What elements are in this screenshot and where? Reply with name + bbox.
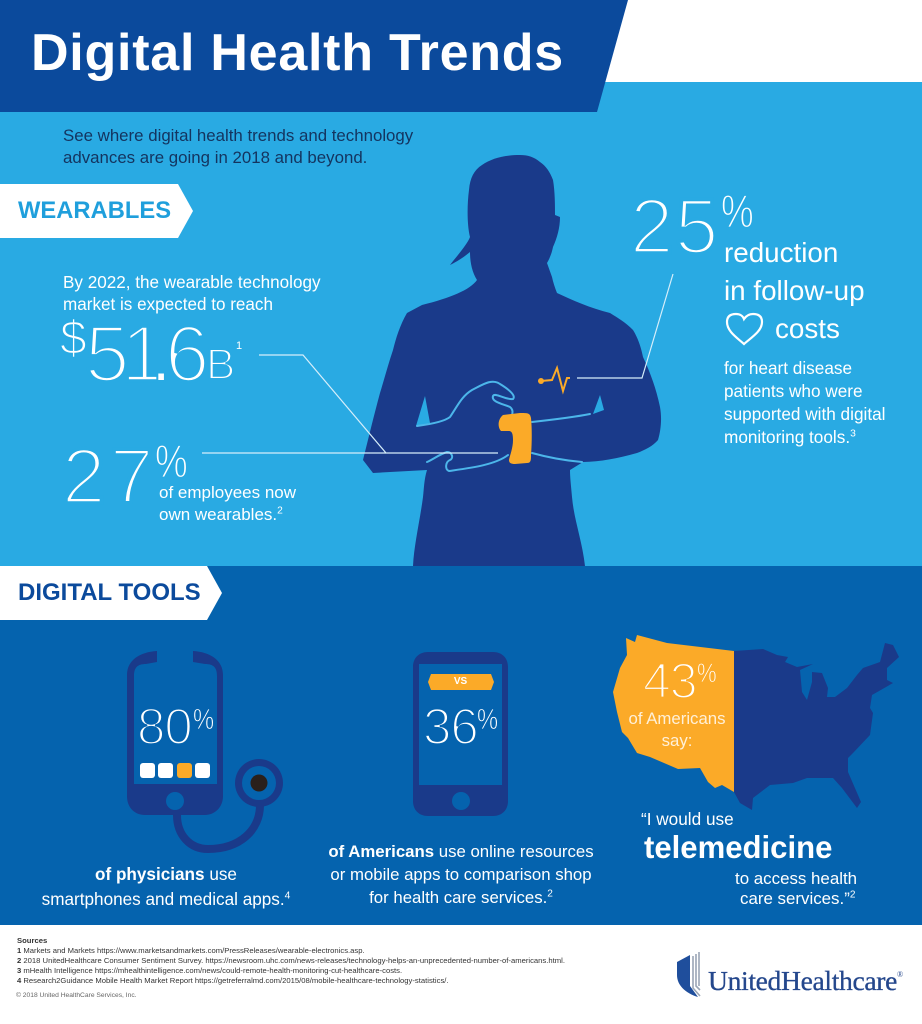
- sources: 3 mHealth Intelligence https://mhealthintelligence.com/news/could-remote-health-monitoring-cut-healthcare-costs.: [17, 966, 402, 975]
- 51.6B stat: 6: [165, 309, 210, 398]
- 27 percent stat: %: [155, 435, 188, 487]
- 25 percent stat: [630, 182, 754, 270]
- 80 percent stat: %: [193, 704, 214, 736]
- wearables background panel: [0, 82, 922, 566]
- market text: By 2022, the wearable technology: [63, 273, 321, 292]
- 51.6B stat: B: [206, 340, 235, 389]
- heart icon: [727, 314, 762, 344]
- market text: market is expected to reach: [63, 295, 273, 314]
- access text: [735, 869, 857, 908]
- wearables heading: WEARABLES: [18, 197, 171, 224]
- 51.6B stat: 1: [121, 309, 166, 398]
- 43 percent stat: %: [697, 658, 716, 688]
- heart disease text: monitoring tools.3: [724, 427, 856, 447]
- reduction text: costs: [775, 313, 840, 344]
- heart disease text: [724, 358, 885, 447]
- 51.6B stat: .: [150, 309, 172, 398]
- 51.6B stat: 1: [236, 340, 242, 352]
- 36 percent stat: %: [477, 704, 498, 736]
- 51.6B stat: [60, 309, 242, 398]
- sources: 2 2018 UnitedHealthcare Consumer Sentiment Survey. https://newsroom.uhc.com/news-releases/technology-helps-an-unprecedented-number-of-americans.html.: [17, 956, 565, 965]
- employees text: [159, 483, 296, 524]
- UnitedHealthcare shield logo: [677, 952, 700, 997]
- physicians text: smartphones and medical apps.4: [42, 888, 290, 908]
- 80 percent stat: 80: [137, 698, 192, 755]
- of americans say text: say:: [662, 731, 692, 750]
- UnitedHealthcare wordmark: UnitedHealthcare®: [708, 965, 903, 996]
- 27 percent stat: 7: [110, 432, 153, 520]
- americans text: [328, 842, 594, 907]
- 27 percent stat: [62, 432, 188, 520]
- copyright: © 2018 United HealthCare Services, Inc.: [16, 992, 137, 999]
- intro text: advances are going in 2018 and beyond.: [63, 148, 367, 167]
- title: Digital Health Trends: [31, 24, 564, 82]
- americans text: or mobile apps to comparison shop: [330, 865, 592, 884]
- 51.6B stat: $: [60, 312, 87, 365]
- telemedicine text: telemedicine: [644, 830, 832, 865]
- VS label: VS: [454, 676, 467, 687]
- 27 percent stat: 2: [62, 432, 105, 520]
- quote text: “I would use: [641, 809, 734, 829]
- heartbeat icon: [538, 368, 570, 391]
- reduction text: reduction: [724, 237, 838, 268]
- access text: to access health: [735, 869, 857, 888]
- americans text: of Americans use online resources: [328, 842, 594, 861]
- intro text: [63, 126, 414, 167]
- americans text: for health care services.2: [369, 888, 553, 907]
- 25 percent stat: 2: [630, 182, 673, 270]
- 36 percent stat: 36: [423, 698, 478, 755]
- 25 percent stat: %: [721, 185, 754, 237]
- wrist device: [499, 413, 532, 464]
- digital tools ribbon: [0, 566, 222, 620]
- header banner: [0, 0, 628, 112]
- 25 percent stat: 5: [675, 182, 718, 270]
- wearables ribbon: [0, 184, 193, 238]
- sources: [17, 936, 565, 985]
- callout lines: [202, 274, 673, 453]
- of americans say text: [628, 709, 726, 750]
- 43 percent stat: 43: [643, 653, 697, 709]
- US map: [613, 635, 899, 810]
- 51.6B stat: 5: [85, 309, 130, 398]
- hand outlines: [417, 382, 590, 471]
- phone comparison icon: [413, 652, 508, 816]
- sources: Sources: [17, 936, 47, 945]
- silhouette of person: [202, 155, 673, 566]
- reduction text: in follow-up: [724, 275, 865, 306]
- employees text: of employees now: [159, 483, 296, 502]
- sources: 1 Markets and Markets https://www.marketsandmarkets.com/PressReleases/wearable-electronics.asp.: [17, 946, 365, 955]
- digital tools background panel: [0, 566, 922, 925]
- physicians text: [42, 864, 290, 908]
- physicians text: of physicians use: [95, 864, 237, 884]
- digital tools heading: DIGITAL TOOLS: [18, 579, 201, 606]
- access text: care services.”2: [740, 889, 855, 908]
- employees text: own wearables.2: [159, 505, 283, 524]
- reduction text: [724, 237, 865, 344]
- heart disease text: for heart disease: [724, 358, 852, 378]
- of americans say text: of Americans: [628, 709, 726, 728]
- heart disease text: supported with digital: [724, 404, 885, 424]
- sources: 4 Research2Guidance Mobile Health Market Report https://getreferralmd.com/2015/08/mobile-healthcare-technology-statistics/.: [17, 976, 449, 985]
- intro text: See where digital health trends and technology: [63, 126, 413, 145]
- heart disease text: patients who were: [724, 381, 863, 401]
- market text: [63, 273, 321, 314]
- phone with stethoscope icon: [127, 651, 283, 849]
